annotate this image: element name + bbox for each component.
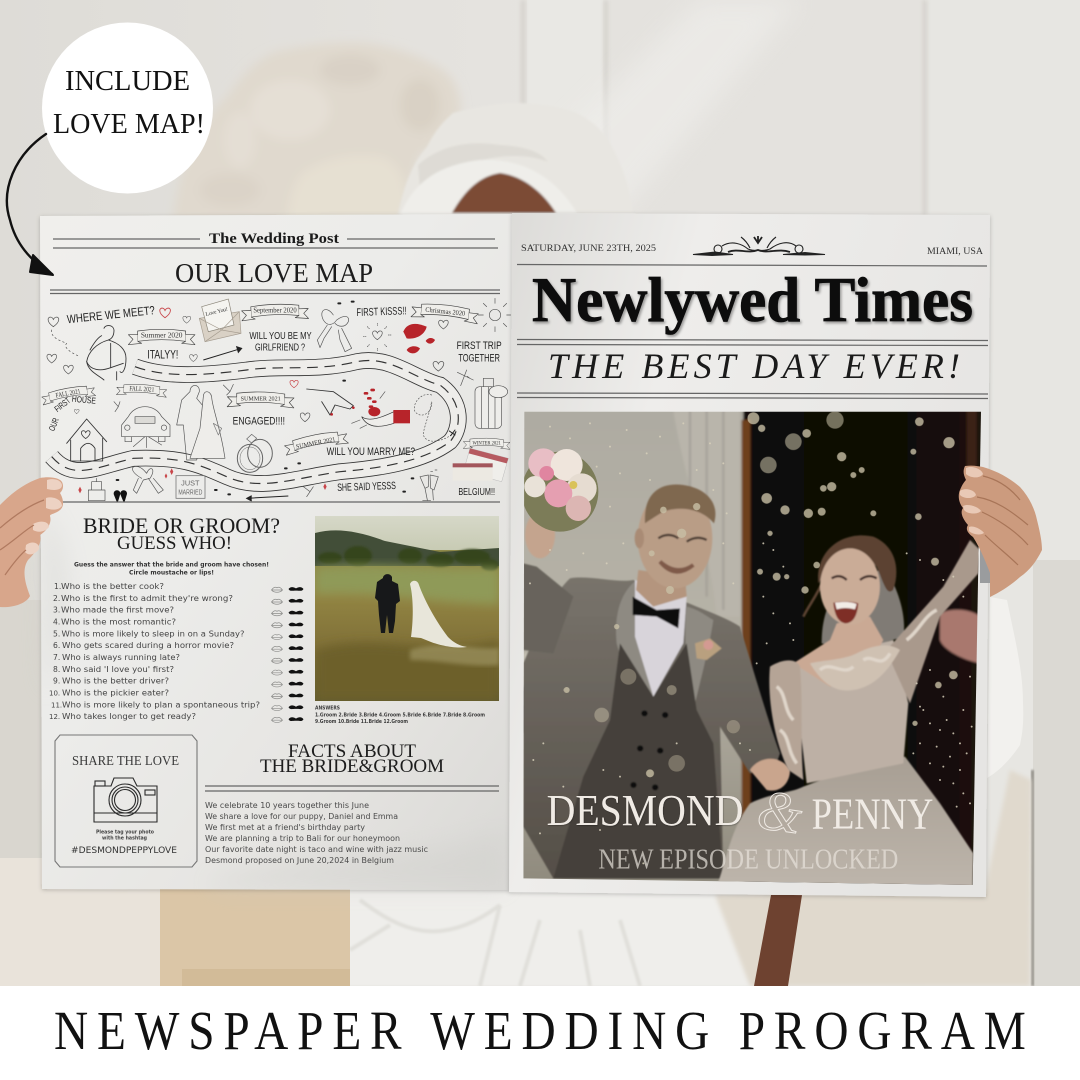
boutonniere bbox=[695, 638, 722, 660]
subtitle: the best day ever: THE BEST DAY EVER! bbox=[548, 346, 960, 386]
quiz questions: 10. bbox=[49, 690, 60, 698]
bow tie bbox=[633, 597, 680, 628]
background: bed bbox=[715, 770, 1031, 986]
map labels: FIRST bbox=[52, 395, 73, 414]
groom vest bbox=[553, 643, 723, 878]
groom bbox=[523, 485, 790, 878]
icon: just married sign: MARRIED bbox=[178, 487, 202, 496]
landscape couple photo bbox=[315, 516, 499, 701]
icon: proposal hand with ring and hearts bbox=[307, 389, 410, 428]
map labels: BELGIUM!! bbox=[458, 487, 495, 498]
photo title: Desmond & Penny: PENNY bbox=[812, 789, 933, 838]
quiz questions: 3. bbox=[53, 606, 60, 614]
newspaper left page bbox=[40, 214, 512, 890]
paper shading bbox=[42, 505, 505, 888]
icon: envelope: Love You! bbox=[205, 307, 229, 318]
photo title: Desmond & Penny: DESMOND bbox=[547, 786, 743, 835]
quiz questions: 7. bbox=[53, 653, 60, 662]
confetti specks bbox=[530, 423, 972, 863]
ribbons bbox=[41, 302, 510, 455]
icon: linked keys bbox=[317, 310, 352, 352]
bride lace arms bbox=[887, 540, 980, 703]
groom shirt bbox=[635, 580, 687, 697]
icon: red kiss lips bbox=[403, 324, 435, 353]
heading: Bride or Groom: BRIDE OR GROOM? bbox=[83, 513, 280, 538]
photo title: Desmond & Penny bbox=[548, 792, 932, 834]
photo caption: new episode unlocked: NEW EPISODE UNLOCKED bbox=[598, 844, 898, 875]
map labels: SHE SAID YESSS bbox=[337, 480, 396, 494]
quiz questions: Who said 'I love you' first? bbox=[62, 665, 174, 674]
facts list: We celebrate 10 years together this June bbox=[205, 801, 369, 810]
dateline: SATURDAY, JUNE 23TH, 2025 bbox=[521, 244, 656, 254]
map labels: FIRST TRIP bbox=[457, 340, 502, 352]
lips and moustache answer icons bbox=[272, 587, 304, 722]
quiz questions: Who is more likely to plan a spontaneous trip? bbox=[62, 700, 260, 710]
icon: hugging couple bbox=[87, 326, 126, 380]
background: stool leg bbox=[754, 895, 802, 986]
quiz questions: 6. bbox=[53, 641, 60, 650]
quiz questions: 8. bbox=[53, 665, 60, 674]
quiz questions: Who is more likely to sleep in on a Sunday? bbox=[62, 630, 244, 638]
quiz questions: Who is the first to admit they're wrong? bbox=[61, 594, 233, 603]
icon: doves bbox=[114, 384, 313, 497]
ribbons: Christmas 2020 bbox=[425, 306, 466, 318]
icon: keys small bbox=[132, 466, 163, 493]
map labels: FIRST KISSS!! bbox=[356, 305, 407, 319]
map labels: TOGETHER bbox=[458, 353, 500, 365]
map labels: ITALYY! bbox=[147, 347, 178, 361]
facts list: Desmond proposed on June 20,2024 in Belgium bbox=[205, 856, 394, 865]
instructions: Circle moustache or lips! bbox=[129, 570, 214, 576]
icon: cake bbox=[88, 478, 105, 501]
bride hair bbox=[818, 535, 896, 592]
callout: include love map: LOVE MAP! bbox=[53, 108, 205, 140]
buttons bbox=[633, 713, 665, 787]
heading: Our Love Map: OUR LOVE MAP bbox=[175, 258, 373, 288]
panel: share the love: #DESMONDPEPPYLOVE bbox=[71, 846, 177, 856]
quiz questions bbox=[49, 582, 260, 721]
facts list: Our favorite date night is taco and wine with jazz music bbox=[205, 845, 428, 854]
quiz questions: Who takes longer to get ready? bbox=[62, 712, 196, 721]
facts list bbox=[205, 801, 428, 865]
icon: just married sign bbox=[176, 476, 205, 498]
quiz questions: Who is the better cook? bbox=[61, 582, 164, 591]
map labels: WILL YOU BE MY bbox=[249, 331, 312, 342]
panel: share the love: with the hashtag bbox=[102, 836, 148, 842]
location: MIAMI, USA bbox=[927, 247, 983, 257]
arrow: to love map bbox=[7, 134, 53, 275]
facts list: We first met at a friend's birthday party bbox=[205, 823, 366, 832]
icon: heart with rays bbox=[363, 323, 391, 351]
quiz questions: Who is the pickier eater? bbox=[62, 688, 169, 698]
callout: include love map: INCLUDE bbox=[65, 65, 190, 97]
background: robe sleeve bbox=[987, 597, 1023, 778]
answers: 1.Groom 2.Bride 3.Bride 4.Groom 5.Bride 6.Bride 7.Bride 8.Groom bbox=[315, 712, 485, 718]
ribbons: SUMMER 2021 bbox=[241, 395, 281, 402]
title: Newlywed Times: Newlywed Times bbox=[532, 265, 973, 335]
panel: share the love: SHARE THE LOVE bbox=[72, 753, 179, 768]
road bbox=[52, 360, 458, 484]
instructions: Guess the answer that the bride and groom have chosen! bbox=[74, 562, 269, 568]
bride face bbox=[820, 548, 880, 625]
icon: wedding car bbox=[122, 407, 170, 448]
ribbons: WINTER 2021 bbox=[472, 440, 501, 446]
bouquet bbox=[522, 448, 598, 532]
heading: facts about the bride and groom bbox=[260, 741, 444, 777]
background: wooden floor bbox=[160, 888, 350, 986]
ornament bbox=[693, 236, 825, 256]
love map illustration bbox=[41, 298, 511, 502]
bride figure and veil bbox=[410, 581, 467, 648]
ribbons: September 2020 bbox=[253, 307, 297, 315]
map labels: OUR bbox=[47, 416, 61, 432]
background: bathrobe bbox=[345, 888, 765, 986]
bride bbox=[717, 535, 980, 887]
quiz questions: Who is the better driver? bbox=[62, 676, 169, 686]
icon: dotted loop to plane bbox=[414, 394, 455, 441]
left hand holding paper bbox=[0, 477, 63, 607]
icon: house bbox=[67, 409, 107, 461]
icon: camera bbox=[94, 778, 157, 822]
footer band bbox=[0, 986, 1080, 1080]
heading: Bride or Groom: GUESS WHO! bbox=[117, 533, 232, 554]
quiz questions: 4. bbox=[53, 618, 60, 626]
quiz questions: Who made the first move? bbox=[61, 606, 174, 614]
callout: include love map bbox=[42, 22, 213, 194]
icon: tickets bbox=[453, 448, 508, 482]
facts list: We share a love for our puppy, Daniel and Emma bbox=[205, 812, 398, 821]
ribbons: FALL 2021 bbox=[55, 388, 81, 399]
icon: envelope bbox=[199, 299, 241, 342]
ribbons: FALL 2021 bbox=[129, 385, 154, 394]
groom suit jacket bbox=[523, 578, 780, 878]
quiz questions: 1. bbox=[54, 582, 61, 591]
map labels: ENGAGED!!!! bbox=[233, 415, 285, 427]
map labels bbox=[47, 303, 502, 498]
footer title: NEWSPAPER WEDDING PROGRAM bbox=[54, 1001, 1026, 1062]
heading: facts about the bride and groom: THE BRIDE&GROOM bbox=[260, 756, 444, 777]
groom neck and head bbox=[636, 570, 687, 607]
answers: ANSWERS bbox=[315, 706, 340, 712]
icon: plane and suitcase bbox=[457, 370, 508, 428]
newspaper right page bbox=[509, 213, 990, 897]
icon: just married sign: JUST bbox=[181, 479, 200, 488]
quiz questions: 12. bbox=[49, 713, 60, 721]
background: forehead bbox=[452, 173, 556, 213]
icon: lovebirds bbox=[114, 490, 127, 502]
quiz questions: Who gets scared during a horror movie? bbox=[62, 641, 234, 650]
ribbons: SUMMER 2021 bbox=[295, 436, 336, 451]
icon: hearts and stars bbox=[47, 302, 448, 494]
map labels: GIRLFRIEND ? bbox=[255, 343, 305, 354]
bride bodice bbox=[798, 640, 908, 783]
facts list: We are planning a trip to Bali for our honeymoon bbox=[205, 834, 400, 843]
background: towel on head bbox=[398, 103, 633, 215]
icon: wedding rings bbox=[237, 434, 272, 472]
groom hand bbox=[525, 518, 555, 558]
map labels: HOUSE bbox=[71, 394, 96, 406]
panel: share the love: Please tag your photo bbox=[96, 830, 155, 836]
map labels: WHERE WE MEET? bbox=[66, 303, 156, 326]
answers: 9.Groom 10.Bride 11.Bride 12.Groom bbox=[315, 719, 408, 725]
map labels: WILL YOU MARRY ME? bbox=[327, 446, 415, 458]
panel: share the love bbox=[55, 735, 197, 867]
background: left chair bbox=[0, 858, 186, 986]
quiz questions: 5. bbox=[53, 630, 60, 638]
heading: facts about the bride and groom: FACTS ABOUT bbox=[288, 741, 416, 762]
wedding photo bbox=[510, 410, 983, 887]
quiz questions: 2. bbox=[53, 594, 60, 603]
heading: Bride or Groom bbox=[83, 513, 280, 554]
quiz questions: Who is the most romantic? bbox=[61, 618, 176, 626]
icon: champagne glasses bbox=[420, 470, 438, 501]
right hand holding paper bbox=[959, 466, 1042, 597]
groom figure bbox=[375, 574, 400, 633]
photo background bbox=[510, 410, 983, 887]
ribbons: Summer 2020 bbox=[141, 332, 183, 340]
instructions bbox=[74, 562, 269, 576]
arrow: road direction bbox=[203, 347, 288, 501]
quiz questions: Who is always running late? bbox=[62, 653, 180, 662]
masthead: The Wedding Post: The Wedding Post bbox=[209, 231, 339, 247]
quiz questions: 11. bbox=[51, 702, 62, 710]
icon: bride and groom standing bbox=[177, 385, 225, 460]
quiz questions: 9. bbox=[53, 676, 60, 686]
confetti bokeh bbox=[564, 411, 958, 777]
veil bbox=[822, 567, 904, 650]
bride skirt bbox=[717, 757, 973, 887]
bride neck and chest bbox=[793, 617, 883, 687]
answers bbox=[315, 706, 485, 725]
photo title: Desmond & Penny: & bbox=[754, 779, 806, 846]
background: chair back bbox=[173, 43, 460, 220]
icon: sun bbox=[478, 298, 511, 332]
